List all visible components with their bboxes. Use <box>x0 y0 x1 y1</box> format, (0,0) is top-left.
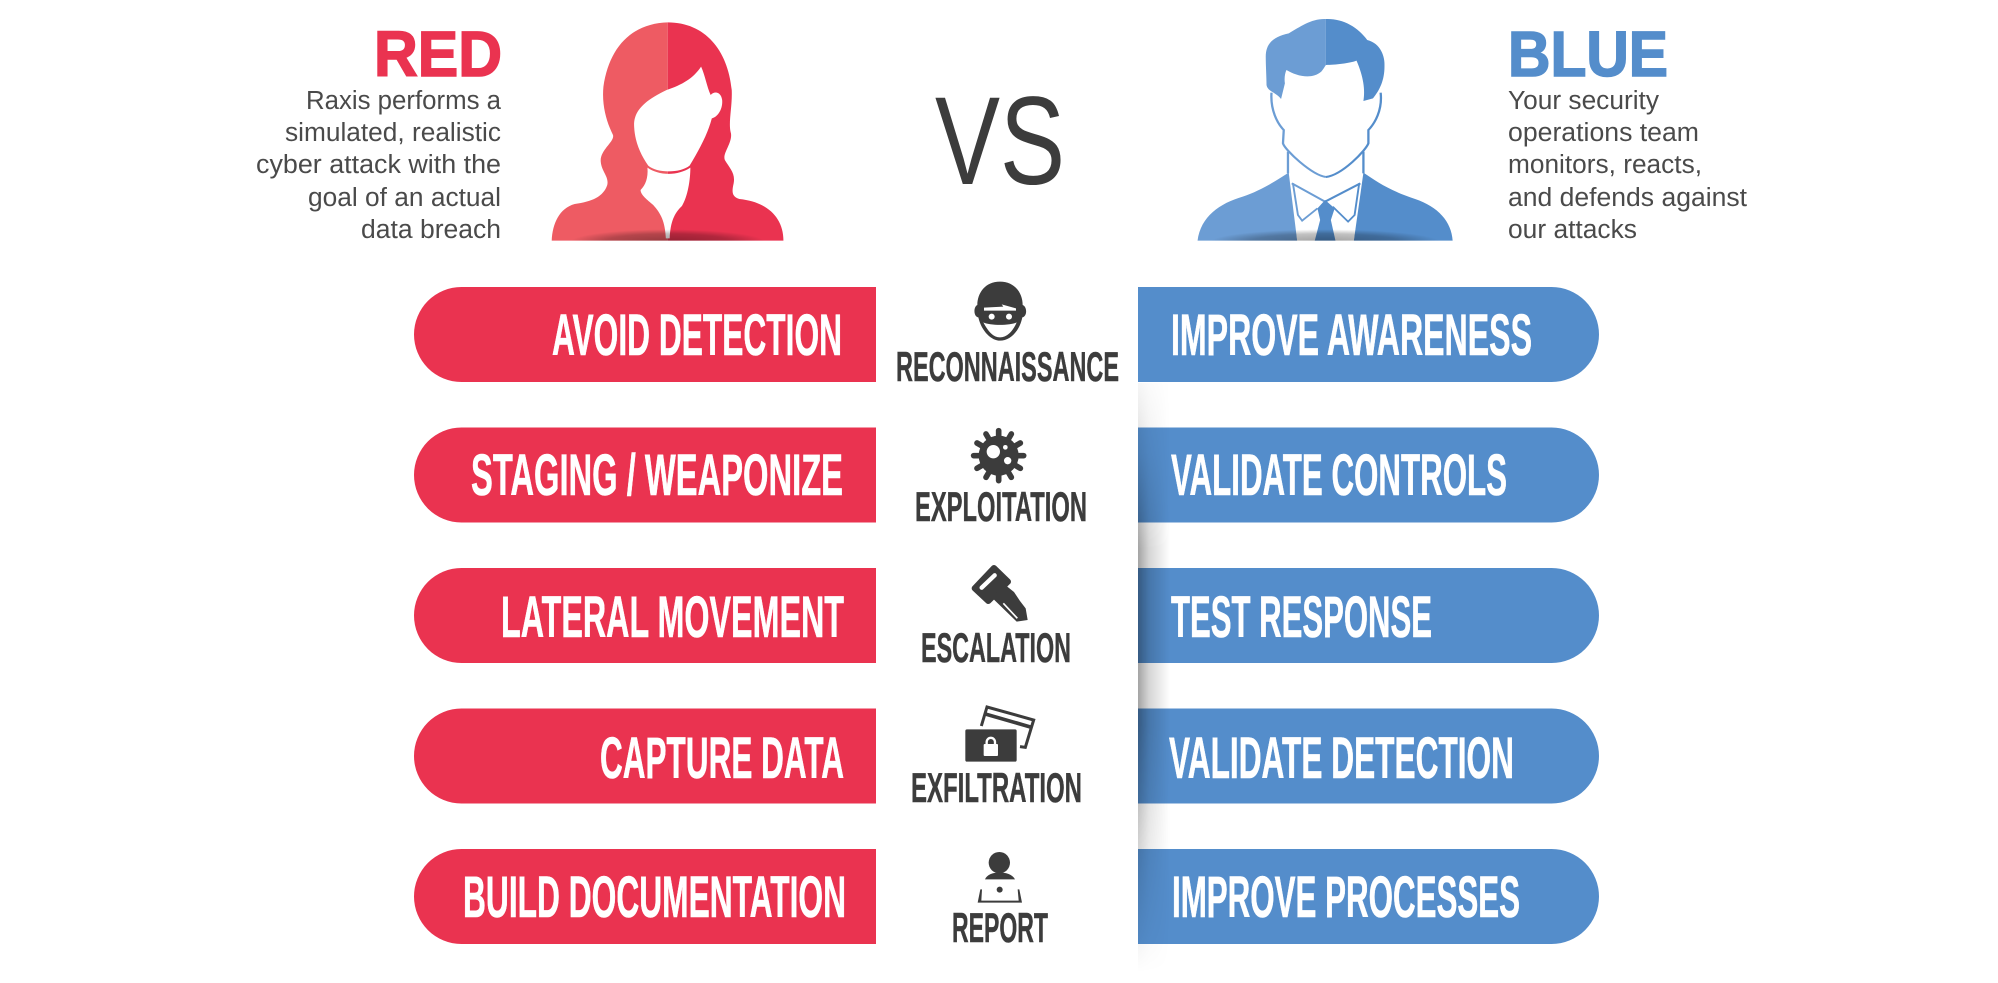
heading: BLUE: BLUE <box>1508 18 1668 90</box>
blue bar labels <box>1169 303 1532 930</box>
blue description <box>1508 87 1747 244</box>
red description: Raxis performs a <box>306 87 502 115</box>
icon: locked cards <box>965 707 1034 762</box>
red bar 1 <box>414 287 876 382</box>
blue bar labels: VALIDATE DETECTION <box>1169 726 1514 791</box>
heading: VS: VS <box>935 72 1065 211</box>
center stage: exploitation <box>915 431 1087 530</box>
blue bar labels: IMPROVE AWARENESS <box>1171 303 1532 368</box>
icon: masked head <box>974 282 1026 341</box>
label: REPORT <box>952 904 1048 951</box>
center stage: reconnaissance <box>896 282 1119 390</box>
red bar 2 <box>414 428 876 522</box>
red bar 3 <box>414 568 876 663</box>
blue description: and defends against <box>1508 184 1747 212</box>
red bar 5 <box>414 849 876 944</box>
blue heading block <box>1508 18 1747 244</box>
blue bar 2 <box>1138 428 1599 522</box>
icon: woman silhouette <box>552 22 783 255</box>
blue description: our attacks <box>1508 216 1637 244</box>
blue bar labels: TEST RESPONSE <box>1171 585 1432 650</box>
label: EXPLOITATION <box>915 483 1087 530</box>
infographic canvas <box>257 19 1747 949</box>
red description: cyber attack with the <box>256 151 501 179</box>
fold shadow along blue column <box>1138 383 1166 949</box>
label: ESCALATION <box>921 624 1071 671</box>
heading: RED: RED <box>374 18 502 90</box>
blue bar 4 <box>1138 708 1599 804</box>
red column bars <box>414 287 876 944</box>
red bar labels: STAGING / WEAPONIZE <box>471 443 843 508</box>
center stage: exfiltration <box>911 707 1082 811</box>
blue bar labels: VALIDATE CONTROLS <box>1171 443 1507 508</box>
icon: virus <box>974 431 1024 481</box>
red description: simulated, realistic <box>285 119 501 147</box>
red description: data breach <box>361 216 501 244</box>
icon: man silhouette <box>1198 19 1453 255</box>
icon: key <box>975 568 1028 622</box>
red heading block <box>256 18 502 244</box>
red bar labels: LATERAL MOVEMENT <box>501 585 844 650</box>
center stage: escalation <box>921 568 1071 671</box>
label: EXFILTRATION <box>911 764 1082 811</box>
blue bar 3 <box>1138 568 1599 663</box>
red bar labels: AVOID DETECTION <box>552 303 842 368</box>
blue bar 5 <box>1138 849 1599 944</box>
blue description: monitors, reacts, <box>1508 151 1702 179</box>
red bar 4 <box>414 708 876 804</box>
red bar labels <box>463 303 846 930</box>
red bar labels: BUILD DOCUMENTATION <box>463 865 846 930</box>
blue column bars <box>1138 287 1599 944</box>
icon: person at laptop <box>978 852 1022 903</box>
red description <box>256 87 502 244</box>
red bar labels: CAPTURE DATA <box>600 726 844 791</box>
blue bar labels: IMPROVE PROCESSES <box>1172 865 1520 930</box>
center stage: report <box>952 852 1048 951</box>
blue bar 1 <box>1138 287 1599 382</box>
label: RECONNAISSANCE <box>896 343 1119 390</box>
blue description: Your security <box>1508 87 1659 115</box>
blue description: operations team <box>1508 119 1699 147</box>
red description: goal of an actual <box>308 184 501 212</box>
